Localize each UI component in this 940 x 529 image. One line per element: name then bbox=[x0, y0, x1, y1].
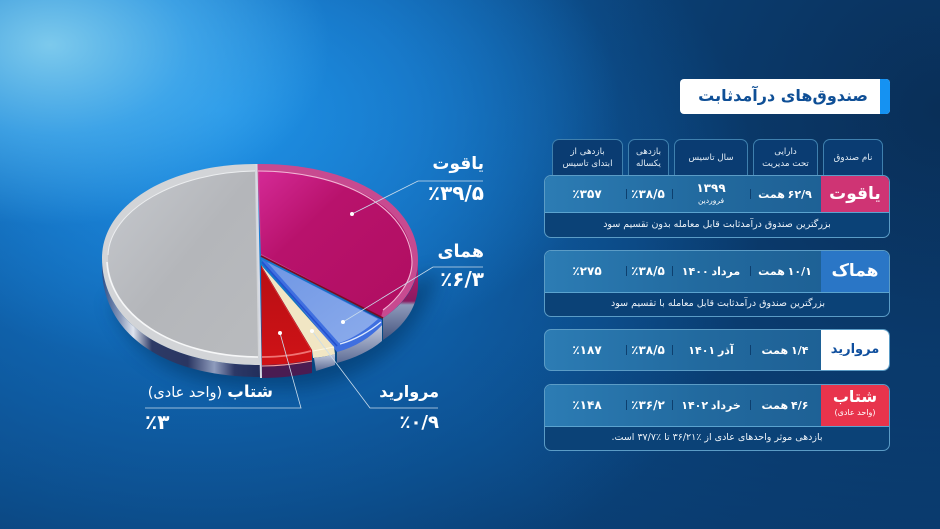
slice: yaghut bbox=[257, 164, 418, 340]
leader line: shetab bbox=[145, 331, 301, 408]
row: yaghut: ٪۳۸/۵ bbox=[631, 187, 665, 201]
label: yaghut bbox=[428, 154, 484, 205]
row: morvarid: مروارید bbox=[831, 342, 879, 357]
row: morvarid bbox=[544, 329, 890, 371]
row: hamak: هماک bbox=[832, 261, 878, 281]
header: assets bbox=[753, 139, 818, 176]
row: yaghut: ۱۳۹۹ bbox=[696, 181, 726, 195]
header: assets: دارایی bbox=[774, 147, 797, 157]
label: hamay: ٪۶/۳ bbox=[440, 267, 484, 291]
leader line: morvarid bbox=[310, 329, 438, 408]
slice: shetab bbox=[261, 265, 312, 378]
row: hamak: ٪۲۷۵ bbox=[572, 264, 602, 278]
row: shetab: بازدهی موثر واحدهای عادی از ٪۳۶/۲۱ تا ٪۳۷/۷ است. bbox=[611, 432, 823, 443]
header: founding year: سال تاسیس bbox=[688, 153, 734, 163]
label: morvarid bbox=[379, 382, 439, 433]
title bbox=[680, 79, 890, 114]
header: since inception return bbox=[552, 139, 623, 176]
row: hamak: بزرگترین صندوق درآمدثابت قابل معامله با تقسیم سود bbox=[611, 298, 825, 309]
row: shetab: (واحد عادی) bbox=[834, 408, 876, 417]
label: hamay: همای bbox=[438, 242, 484, 262]
header: annual return: یکساله bbox=[636, 159, 661, 169]
header: since inception return: بازدهی از bbox=[570, 147, 605, 157]
shadow bbox=[110, 270, 438, 389]
row: morvarid: آذر ۱۴۰۱ bbox=[688, 344, 734, 357]
label: shetab: شتاب (واحد عادی) bbox=[148, 382, 273, 401]
row: morvarid: ٪۳۸/۵ bbox=[631, 343, 665, 357]
header: fund name: نام صندوق bbox=[834, 153, 872, 163]
row: morvarid: ۱/۴ همت bbox=[762, 344, 808, 357]
header: assets: تحت مدیریت bbox=[762, 159, 809, 169]
row: yaghut bbox=[544, 175, 890, 238]
header: founding year bbox=[674, 139, 748, 176]
row: yaghut: ٪۳۵۷ bbox=[572, 187, 602, 201]
label: shetab: ٪۳ bbox=[145, 410, 169, 434]
header: since inception return: ابتدای تاسیس bbox=[562, 159, 613, 169]
row: yaghut: یاقوت bbox=[829, 184, 881, 204]
header: annual return bbox=[628, 139, 669, 176]
slice: remaining gray bbox=[102, 164, 260, 377]
label: shetab bbox=[145, 382, 273, 434]
row: shetab: ٪۱۴۸ bbox=[572, 398, 602, 412]
row: hamak: ٪۳۸/۵ bbox=[631, 264, 665, 278]
label: yaghut: یاقوت bbox=[432, 154, 484, 174]
row: yaghut: بزرگترین صندوق درآمدثابت قابل معامله بدون تقسیم سود bbox=[603, 219, 831, 230]
row: shetab bbox=[544, 384, 890, 451]
label: hamay bbox=[438, 242, 484, 291]
row: morvarid: ٪۱۸۷ bbox=[572, 343, 602, 357]
row: shetab: ٪۳۶/۲ bbox=[631, 398, 665, 412]
leader line: hamay bbox=[341, 267, 483, 324]
row: shetab: شتاب bbox=[833, 387, 877, 406]
row: yaghut: ۶۲/۹ همت bbox=[758, 188, 812, 201]
label: morvarid: ٪۰/۹ bbox=[399, 412, 439, 433]
title: صندوق‌های درآمدثابت bbox=[698, 86, 868, 105]
label: yaghut: ٪۳۹/۵ bbox=[428, 181, 484, 205]
row: hamak: ۱۰/۱ همت bbox=[758, 265, 812, 278]
row: yaghut: فروردین bbox=[698, 196, 724, 205]
slice: hamay bbox=[261, 259, 382, 363]
label: morvarid: مروارید bbox=[379, 382, 439, 401]
row: shetab: ۴/۶ همت bbox=[762, 399, 808, 412]
header: annual return: بازدهی bbox=[636, 147, 661, 157]
slice: morvarid bbox=[261, 265, 335, 371]
leader line: yaghut bbox=[350, 181, 483, 216]
row: hamak bbox=[544, 250, 890, 317]
header: fund name bbox=[823, 139, 883, 176]
row: hamak: مرداد ۱۴۰۰ bbox=[682, 265, 740, 278]
row: shetab: خرداد ۱۴۰۲ bbox=[681, 399, 741, 412]
